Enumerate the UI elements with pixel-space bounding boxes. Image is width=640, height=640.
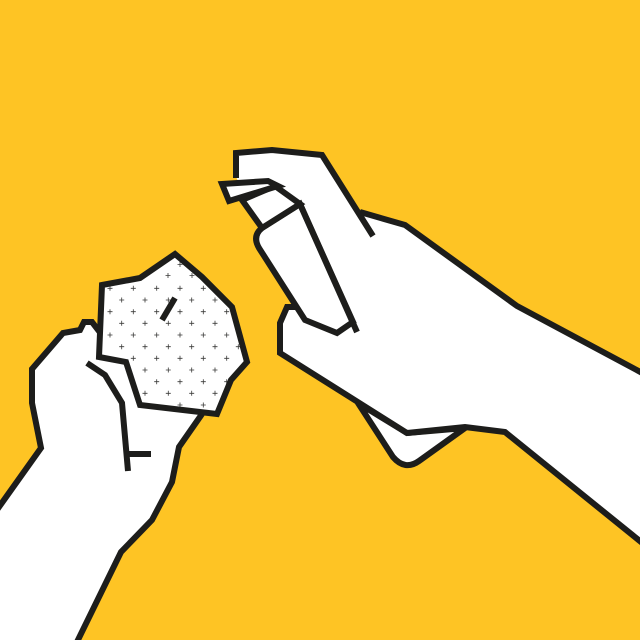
spray bottle base — [358, 403, 465, 465]
palm and forearm — [0, 322, 205, 640]
cloth — [99, 254, 247, 414]
cloth shape — [99, 254, 247, 414]
spray bottle body — [256, 204, 353, 333]
spray mark on cloth — [162, 298, 175, 320]
cloth outline — [99, 254, 247, 414]
right hand outline — [236, 150, 640, 546]
right hand — [236, 150, 640, 546]
spray nozzle — [222, 181, 278, 201]
cloth plus-sign texture — [108, 262, 241, 408]
left hand — [0, 322, 205, 640]
illustration: hands spraying a cloth — [0, 147, 640, 640]
bottle edge line — [300, 204, 357, 332]
spray bottle neck — [242, 186, 300, 228]
left hand finger lines — [87, 363, 151, 471]
